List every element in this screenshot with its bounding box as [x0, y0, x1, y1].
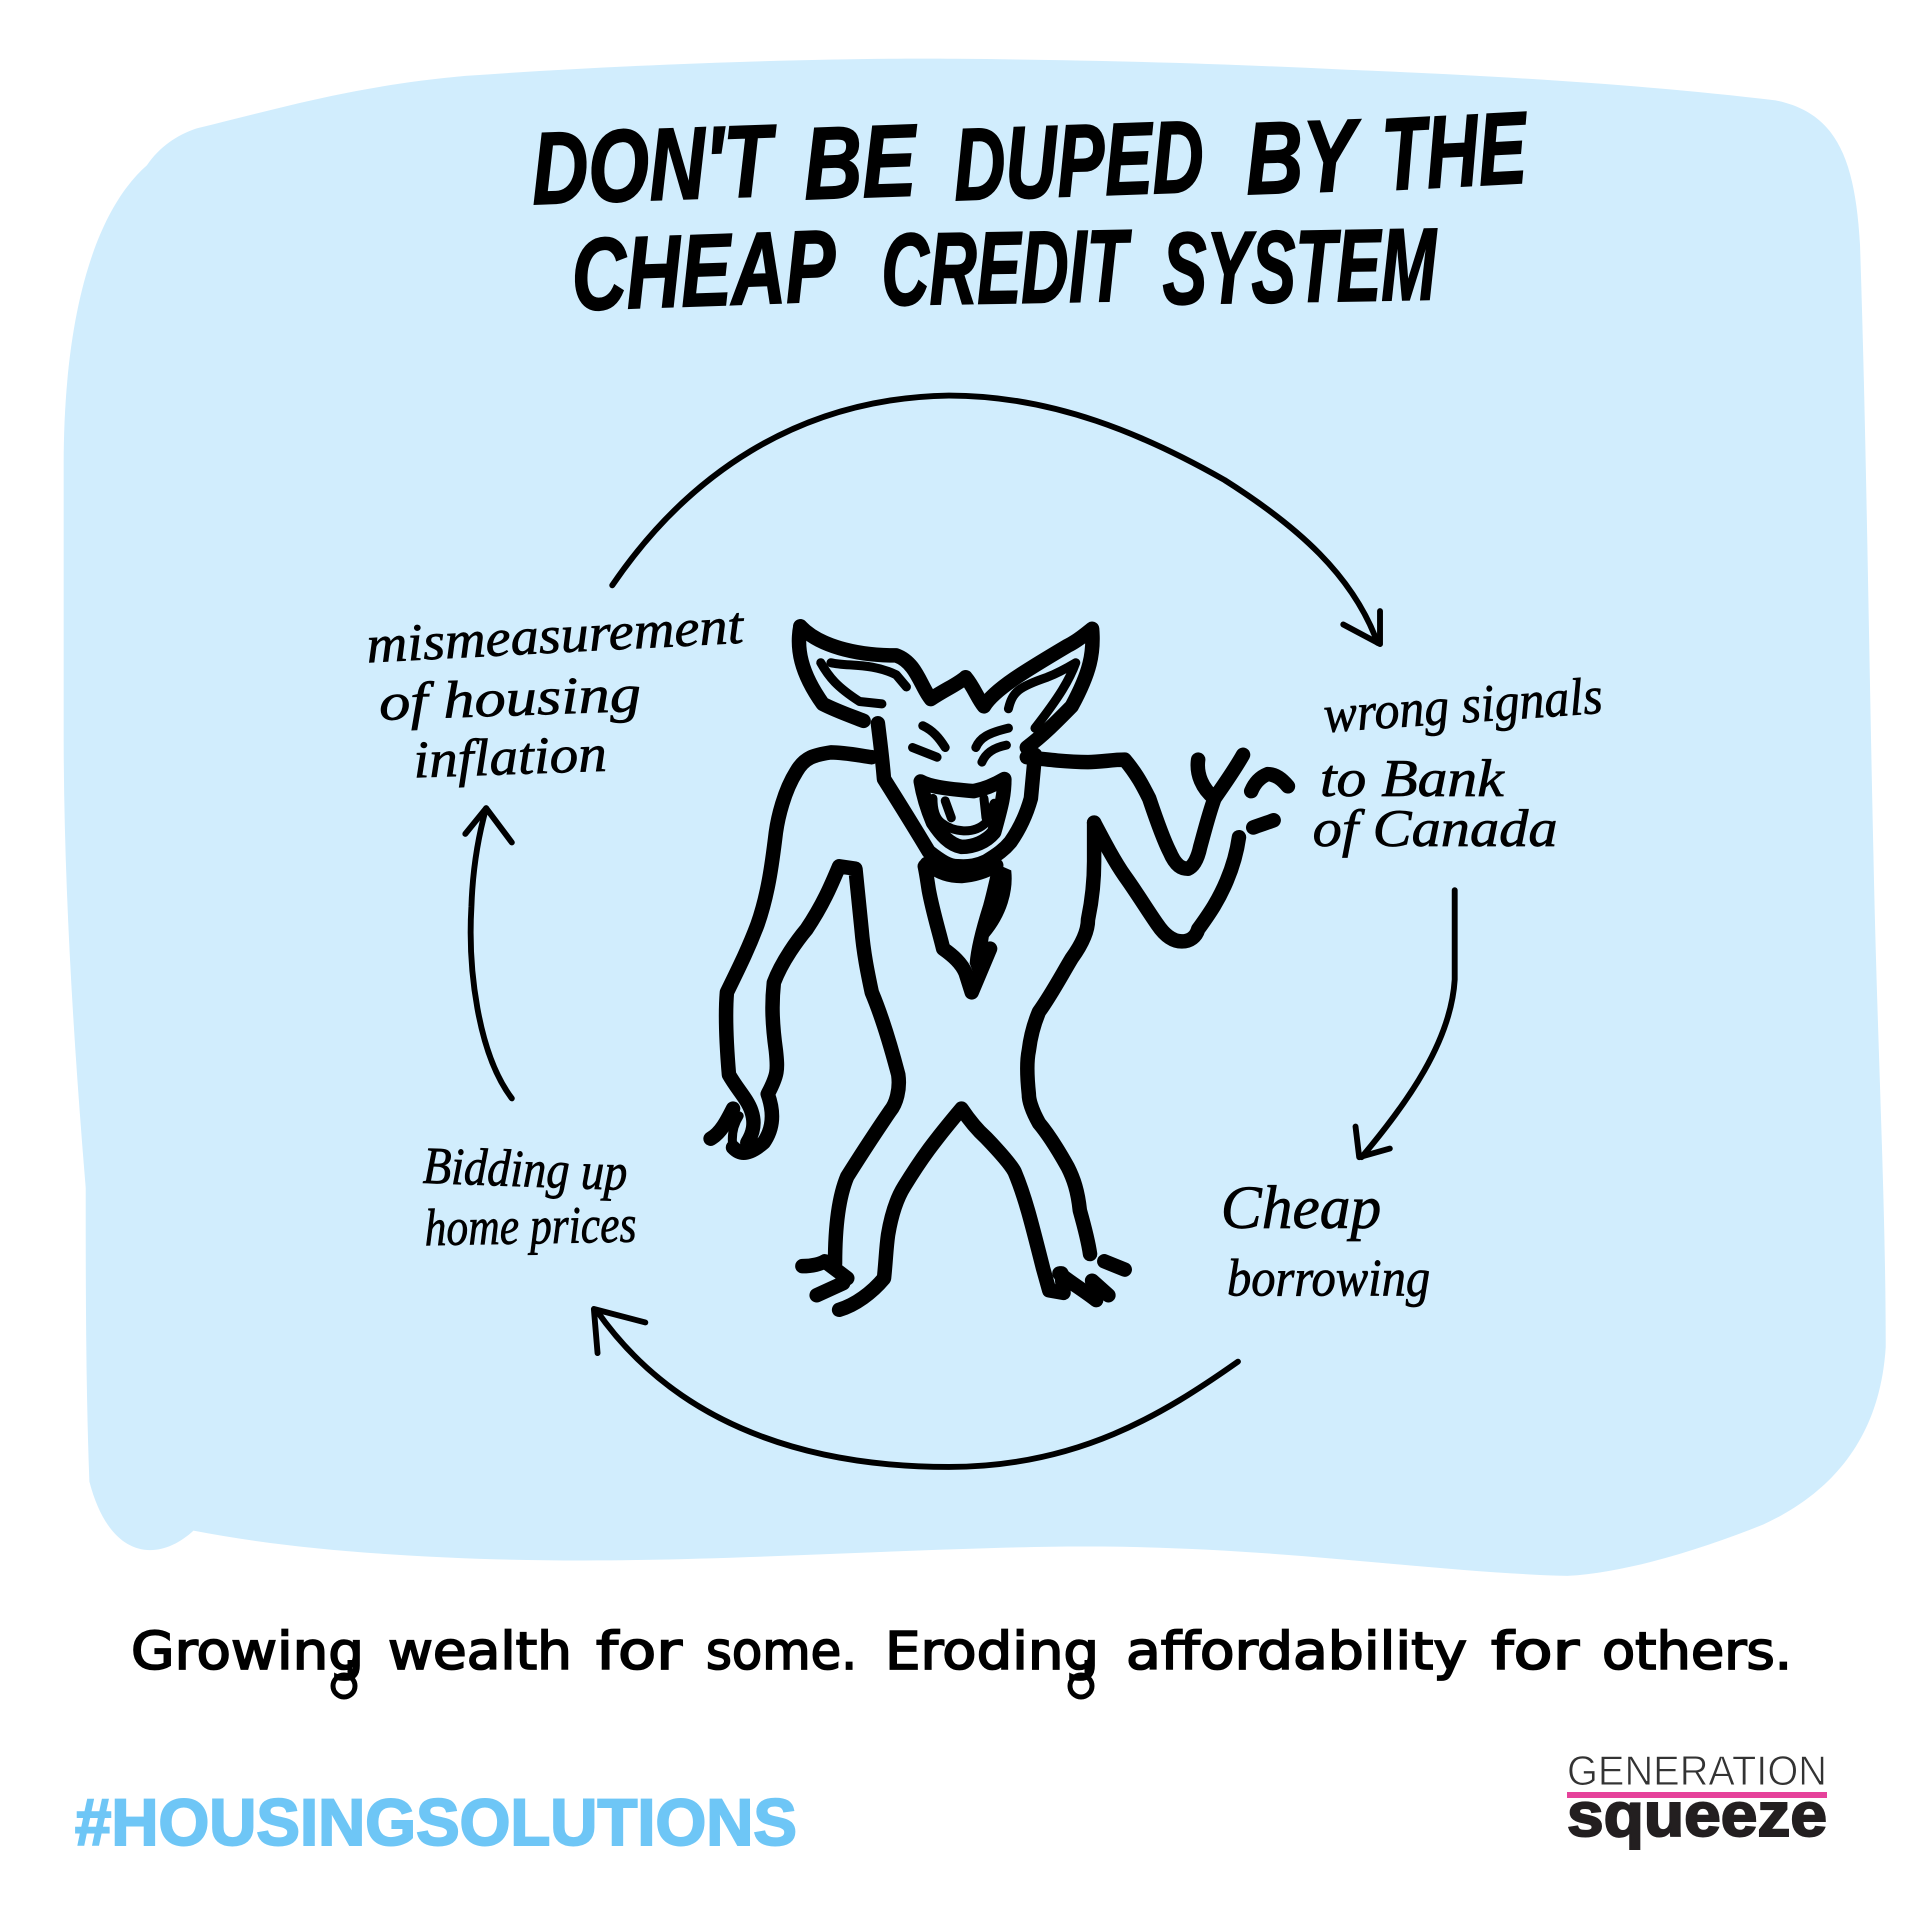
hashtag: #HOUSINGSOLUTIONS — [75, 1785, 797, 1859]
title line two: CREDIT — [880, 209, 1133, 327]
illustration: grinning devil in a suit — [711, 626, 1288, 1310]
arrow: top arc to wrong signals — [612, 396, 1380, 644]
devil head and ears — [799, 626, 1093, 867]
label: wrong signals to Bank of Canada — [1313, 667, 1604, 858]
label: bidding up home prices: home prices — [424, 1196, 637, 1257]
label: mismeasurement of housing inflation: inflation — [412, 725, 608, 790]
caption: for — [596, 1622, 683, 1682]
label: cheap borrowing: borrowing — [1227, 1250, 1430, 1308]
title line two: CHEAP — [570, 209, 838, 332]
caption: Growing — [131, 1622, 364, 1682]
arrow: cheap borrowing to bidding up — [594, 1309, 1238, 1467]
caption: for — [1491, 1622, 1580, 1682]
title line two — [570, 207, 1439, 332]
title line one: BE — [802, 103, 920, 221]
label: mismeasurement of housing inflation — [365, 597, 746, 790]
cycle labels — [365, 597, 1604, 1308]
title line one: DUPED — [952, 99, 1206, 222]
devil face — [913, 726, 1008, 847]
arrow: wrong signals to cheap borrowing — [1356, 890, 1455, 1157]
label: cheap borrowing: Cheap — [1221, 1174, 1381, 1242]
caption: some. — [706, 1622, 857, 1682]
title — [530, 90, 1531, 332]
caption: Eroding — [885, 1622, 1099, 1682]
label: wrong signals to Bank of Canada: wrong signals — [1322, 667, 1604, 744]
title line two: SYSTEM — [1161, 207, 1439, 326]
label: cheap borrowing — [1221, 1174, 1430, 1308]
label: bidding up home prices — [422, 1137, 637, 1257]
logo: Generation Squeeze: GENERATION — [1567, 1747, 1827, 1794]
logo: Generation Squeeze — [1567, 1747, 1827, 1850]
label: bidding up home prices: Bidding up — [422, 1137, 628, 1202]
label: mismeasurement of housing inflation: of housing — [378, 665, 642, 732]
label: wrong signals to Bank of Canada: to Bank — [1320, 750, 1506, 808]
title line one: THE — [1379, 90, 1531, 212]
panel: light blue hand-painted background — [64, 59, 1886, 1576]
caption — [131, 1622, 1792, 1682]
caption: others. — [1602, 1622, 1792, 1682]
caption: affordability — [1126, 1622, 1467, 1682]
label: mismeasurement of housing inflation: mismeasurement — [365, 597, 746, 674]
arrow: bidding up to mismeasurement — [465, 808, 512, 1098]
caption: wealth — [388, 1622, 572, 1682]
devil tie and collar — [925, 864, 1011, 992]
title line one: BY — [1244, 98, 1364, 216]
cycle arrows — [465, 396, 1455, 1467]
title line one — [530, 90, 1531, 226]
label: wrong signals to Bank of Canada: of Canada — [1313, 800, 1558, 858]
logo: Generation Squeeze: squeeze — [1567, 1781, 1827, 1850]
devil body and limbs — [711, 752, 1288, 1310]
caption g-descender loops — [333, 1660, 1092, 1697]
title line one: DON'T — [530, 103, 780, 226]
